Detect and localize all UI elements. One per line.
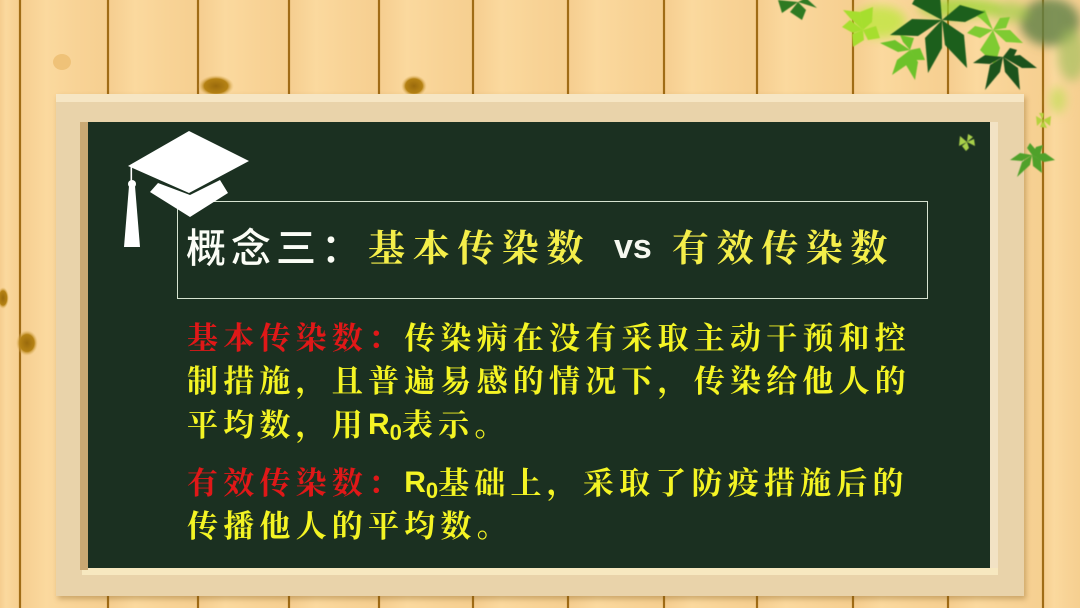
frame right inner highlight [990,122,998,568]
foliage background [854,0,1080,113]
heading term two yellow: 有效传染数 [672,218,895,272]
definition line one: 基本传染数：传染病在没有采取主动干预和控 [187,313,911,358]
effective definition line one: 有效传染数：R0基础上，采取了防疫措施后的 [187,458,909,503]
heading border box [177,201,928,299]
heading vs: vs [614,228,652,266]
definition line three: 平均数，用R0表示。 [187,400,511,445]
frame bottom inner highlight [82,568,998,575]
chalkboard panel [88,122,990,568]
bright leaf left [842,7,880,47]
text block: basic reproduction number [187,313,911,445]
heading label white: 概念三： [186,216,366,274]
frame top highlight [56,94,1024,102]
icon: graduation cap [124,131,249,247]
definition line two: 制措施，且普遍易感的情况下，传染给他人的 [187,356,911,401]
light leaf right [967,10,1023,65]
small leaf right of frame [1036,113,1051,128]
green leaf mid left [880,35,925,80]
heading: concept three [186,216,895,274]
heading term one yellow: 基本传染数 [368,218,591,272]
leaves top right [777,0,1080,178]
small leaf on board [959,134,975,151]
dark leaf right [973,48,1037,90]
dark green main leaf [890,0,985,73]
text block: effective reproduction number [187,458,909,546]
small leaf top [778,0,817,20]
wooden chalkboard frame [56,94,1024,596]
frame left inner shade [80,122,88,570]
leaf lower right [1010,143,1055,177]
effective definition line two: 传播他人的平均数。 [187,501,513,546]
